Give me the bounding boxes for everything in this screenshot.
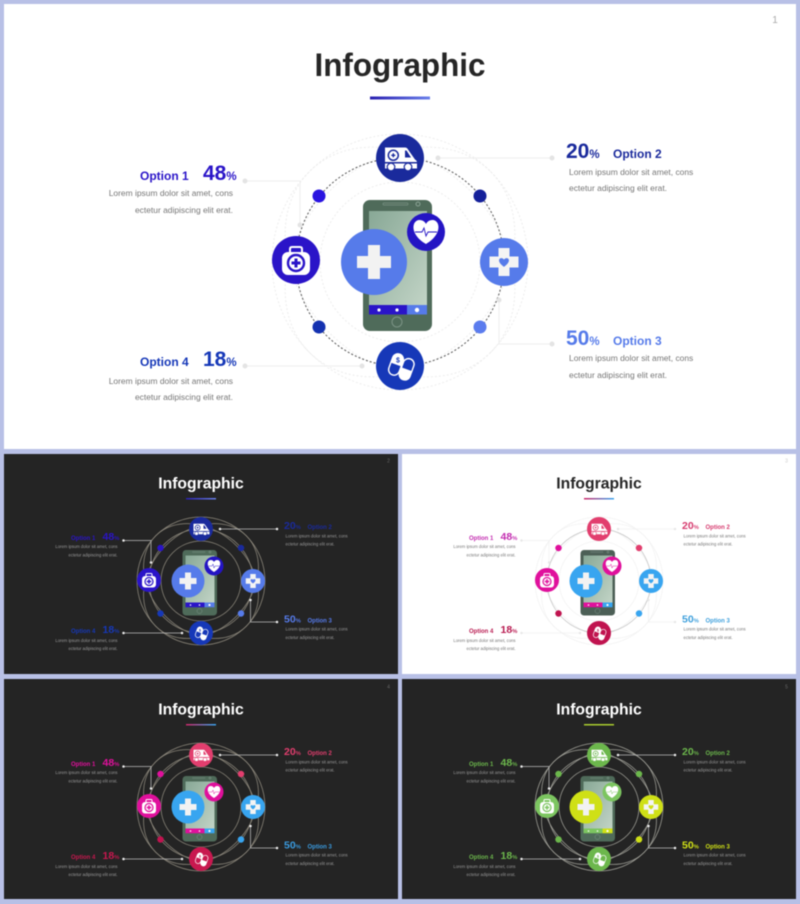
option 1 [453, 757, 517, 784]
option 1: ectetur adipiscing elit erat. [466, 552, 516, 558]
option 4: ectetur adipiscing elit erat. [466, 646, 516, 651]
icon: medical kit [137, 794, 161, 818]
orbit rings [239, 101, 561, 423]
option 2: Option 2 [613, 147, 662, 161]
option 1: ectetur adipiscing elit erat. [135, 205, 233, 215]
option 2: Lorem ipsum dolor sit amet, cons [684, 534, 746, 538]
option 3: 50% [284, 614, 301, 626]
icon: pills: $ [597, 854, 599, 858]
title: Infographic [556, 702, 642, 718]
option 2: Lorem ipsum dolor sit amet, cons [684, 760, 746, 764]
option 3: ectetur adipiscing elit erat. [684, 861, 733, 866]
orbit dots [555, 771, 642, 843]
option 1: Lorem ipsum dolor sit amet, cons [55, 770, 118, 775]
panel: white slide, pink and sky blue [402, 454, 796, 674]
option 1: Option 1 [71, 762, 96, 768]
option 4: Lorem ipsum dolor sit amet, cons [55, 864, 118, 869]
option 3: 50% [682, 840, 699, 852]
option 3: ectetur adipiscing elit erat. [286, 635, 335, 640]
icon: medical kit [535, 568, 559, 592]
orbit dots [157, 771, 244, 843]
option 2: Option 2 [706, 751, 730, 757]
option 4 [453, 624, 517, 651]
option 1: 48% [102, 531, 119, 543]
icon: medical kit [272, 236, 320, 284]
option 1: Option 1 [469, 762, 494, 768]
option 1: ectetur adipiscing elit erat. [68, 778, 118, 784]
orbit rings [518, 726, 680, 888]
phone [363, 200, 432, 331]
option 2 [566, 140, 693, 193]
option 2: Option 2 [308, 525, 332, 531]
phone [580, 550, 615, 616]
page number: 1 [772, 15, 778, 26]
icon: pills [189, 847, 213, 871]
panel: dark slide, green and lime [402, 679, 796, 899]
option 2: ectetur adipiscing elit erat. [569, 183, 667, 193]
option 4: Option 4 [140, 355, 189, 369]
option 2: Option 2 [706, 525, 730, 531]
option 3 [682, 614, 746, 640]
option 4: Lorem ipsum dolor sit amet, cons [55, 638, 118, 643]
option 1: 48% [203, 162, 237, 185]
icon: ambulance [189, 743, 213, 767]
panel: dark slide, pink and sky blue [4, 679, 398, 899]
option 3: 50% [566, 327, 600, 350]
page number: 2 [387, 458, 390, 464]
icon: heart rate [407, 213, 445, 251]
panel: main slide, blue on white [4, 4, 796, 449]
option 2: ectetur adipiscing elit erat. [286, 542, 335, 546]
option 1: Lorem ipsum dolor sit amet, cons [55, 544, 118, 549]
icon: big medical cross [570, 564, 602, 598]
connector lines [122, 754, 278, 860]
icon: cross with heart [241, 795, 265, 819]
icon: big medical cross [341, 229, 407, 295]
option 3: ectetur adipiscing elit erat. [684, 635, 733, 640]
option 1 [55, 757, 119, 784]
option 4: Option 4 [71, 629, 96, 635]
icon: cross with heart [480, 238, 528, 286]
icon: ambulance [189, 517, 213, 541]
option 1: Option 1 [469, 536, 494, 542]
option 4: Lorem ipsum dolor sit amet, cons [453, 638, 516, 643]
option 1: Lorem ipsum dolor sit amet, cons [453, 544, 516, 549]
panel: dark slide, blue [4, 454, 398, 674]
option 4 [55, 624, 119, 651]
option 1: 48% [102, 757, 119, 769]
option 1: Lorem ipsum dolor sit amet, cons [109, 188, 233, 198]
option 2: 20% [284, 520, 301, 532]
option 4: ectetur adipiscing elit erat. [68, 872, 118, 877]
option 4: ectetur adipiscing elit erat. [135, 392, 233, 402]
option 1: 48% [500, 531, 517, 543]
option 1: ectetur adipiscing elit erat. [466, 778, 516, 784]
option 1: 48% [500, 757, 517, 769]
icon: ambulance [376, 134, 424, 182]
option 2: 20% [682, 520, 699, 532]
option 4: ectetur adipiscing elit erat. [68, 646, 118, 651]
option 4: Option 4 [469, 855, 494, 861]
connector lines [122, 528, 278, 634]
option 4 [109, 348, 237, 402]
orbit dots [555, 545, 642, 617]
phone [182, 550, 217, 616]
title underline [584, 498, 614, 500]
option 3: Lorem ipsum dolor sit amet, cons [286, 626, 348, 632]
connector lines [520, 528, 676, 634]
option 2 [284, 746, 348, 772]
option 3: Option 3 [706, 618, 730, 624]
icon: big medical cross [172, 790, 204, 824]
option 4: ectetur adipiscing elit erat. [466, 872, 516, 877]
orbit rings [518, 500, 680, 662]
option 1: Lorem ipsum dolor sit amet, cons [453, 770, 516, 775]
icon: pills: $ [396, 358, 400, 364]
option 4: 18% [203, 348, 237, 371]
icon: cross with heart [639, 569, 663, 593]
option 3: Option 3 [613, 334, 662, 348]
icon: pills [189, 621, 213, 645]
icon: heart rate [204, 782, 224, 802]
page number: 3 [785, 458, 788, 464]
icon: pills [587, 847, 611, 871]
option 3: Option 3 [308, 618, 332, 624]
icon: cross with heart [241, 569, 265, 593]
phone [182, 776, 217, 842]
option 4 [55, 850, 119, 877]
icon: medical kit [535, 794, 559, 818]
icon: pills: $ [199, 628, 201, 632]
icon: big medical cross [570, 790, 602, 824]
title: Infographic [158, 476, 244, 492]
option 2: Lorem ipsum dolor sit amet, cons [286, 760, 348, 764]
option 3: Lorem ipsum dolor sit amet, cons [684, 626, 746, 632]
option 2 [284, 520, 348, 546]
page number: 4 [387, 684, 390, 690]
option 4: Option 4 [71, 855, 96, 861]
icon: ambulance [587, 743, 611, 767]
icon: pills [376, 342, 424, 390]
icon: big medical cross [172, 564, 204, 598]
option 4: Lorem ipsum dolor sit amet, cons [109, 376, 233, 386]
icon: pills [587, 621, 611, 645]
option 2: ectetur adipiscing elit erat. [286, 768, 335, 772]
title: Infographic [158, 702, 244, 718]
option 4: 18% [500, 850, 517, 862]
option 3 [682, 840, 746, 866]
option 2: ectetur adipiscing elit erat. [684, 768, 733, 772]
icon: heart rate [602, 556, 622, 576]
option 1 [453, 531, 517, 558]
page number: 5 [785, 684, 788, 690]
option 2: Lorem ipsum dolor sit amet, cons [569, 167, 693, 177]
option 2: Lorem ipsum dolor sit amet, cons [286, 534, 348, 538]
option 1 [55, 531, 119, 558]
icon: pills: $ [199, 854, 201, 858]
option 1: ectetur adipiscing elit erat. [68, 552, 118, 558]
option 1: Option 1 [71, 536, 96, 542]
orbit dots [312, 190, 486, 334]
option 3 [284, 614, 348, 640]
icon: cross with heart [639, 795, 663, 819]
title: Infographic [314, 47, 486, 83]
connector lines [242, 156, 554, 368]
option 2: Option 2 [308, 751, 332, 757]
icon: heart rate [204, 556, 224, 576]
option 4: Option 4 [469, 629, 494, 635]
title: Infographic [556, 476, 642, 492]
option 3 [284, 840, 348, 866]
option 3 [566, 327, 693, 380]
option 3: Lorem ipsum dolor sit amet, cons [569, 353, 693, 363]
phone [580, 776, 615, 842]
option 3: Lorem ipsum dolor sit amet, cons [286, 852, 348, 858]
option 2: ectetur adipiscing elit erat. [684, 542, 733, 546]
option 2: 20% [284, 746, 301, 758]
option 3: 50% [682, 614, 699, 626]
option 2: 20% [566, 140, 600, 163]
option 4: 18% [102, 850, 119, 862]
option 3: 50% [284, 840, 301, 852]
option 1: Option 1 [140, 169, 189, 183]
option 3: ectetur adipiscing elit erat. [286, 861, 335, 866]
option 3: Option 3 [706, 844, 730, 850]
option 3: ectetur adipiscing elit erat. [569, 370, 667, 380]
option 4: Lorem ipsum dolor sit amet, cons [453, 864, 516, 869]
option 1 [109, 162, 237, 215]
option 3: Option 3 [308, 844, 332, 850]
option 2: 20% [682, 746, 699, 758]
icon: pills: $ [597, 628, 599, 632]
title underline [186, 724, 216, 726]
orbit dots [157, 545, 244, 617]
icon: ambulance [587, 517, 611, 541]
option 4: 18% [500, 624, 517, 636]
title underline [186, 498, 216, 500]
connector lines [520, 754, 676, 860]
option 4 [453, 850, 517, 877]
option 3: Lorem ipsum dolor sit amet, cons [684, 852, 746, 858]
option 2 [682, 746, 746, 772]
option 4: 18% [102, 624, 119, 636]
orbit rings [120, 500, 282, 662]
icon: heart rate [602, 782, 622, 802]
orbit rings [120, 726, 282, 888]
icon: medical kit [137, 568, 161, 592]
title underline [584, 724, 614, 726]
option 2 [682, 520, 746, 546]
title underline [370, 96, 430, 100]
